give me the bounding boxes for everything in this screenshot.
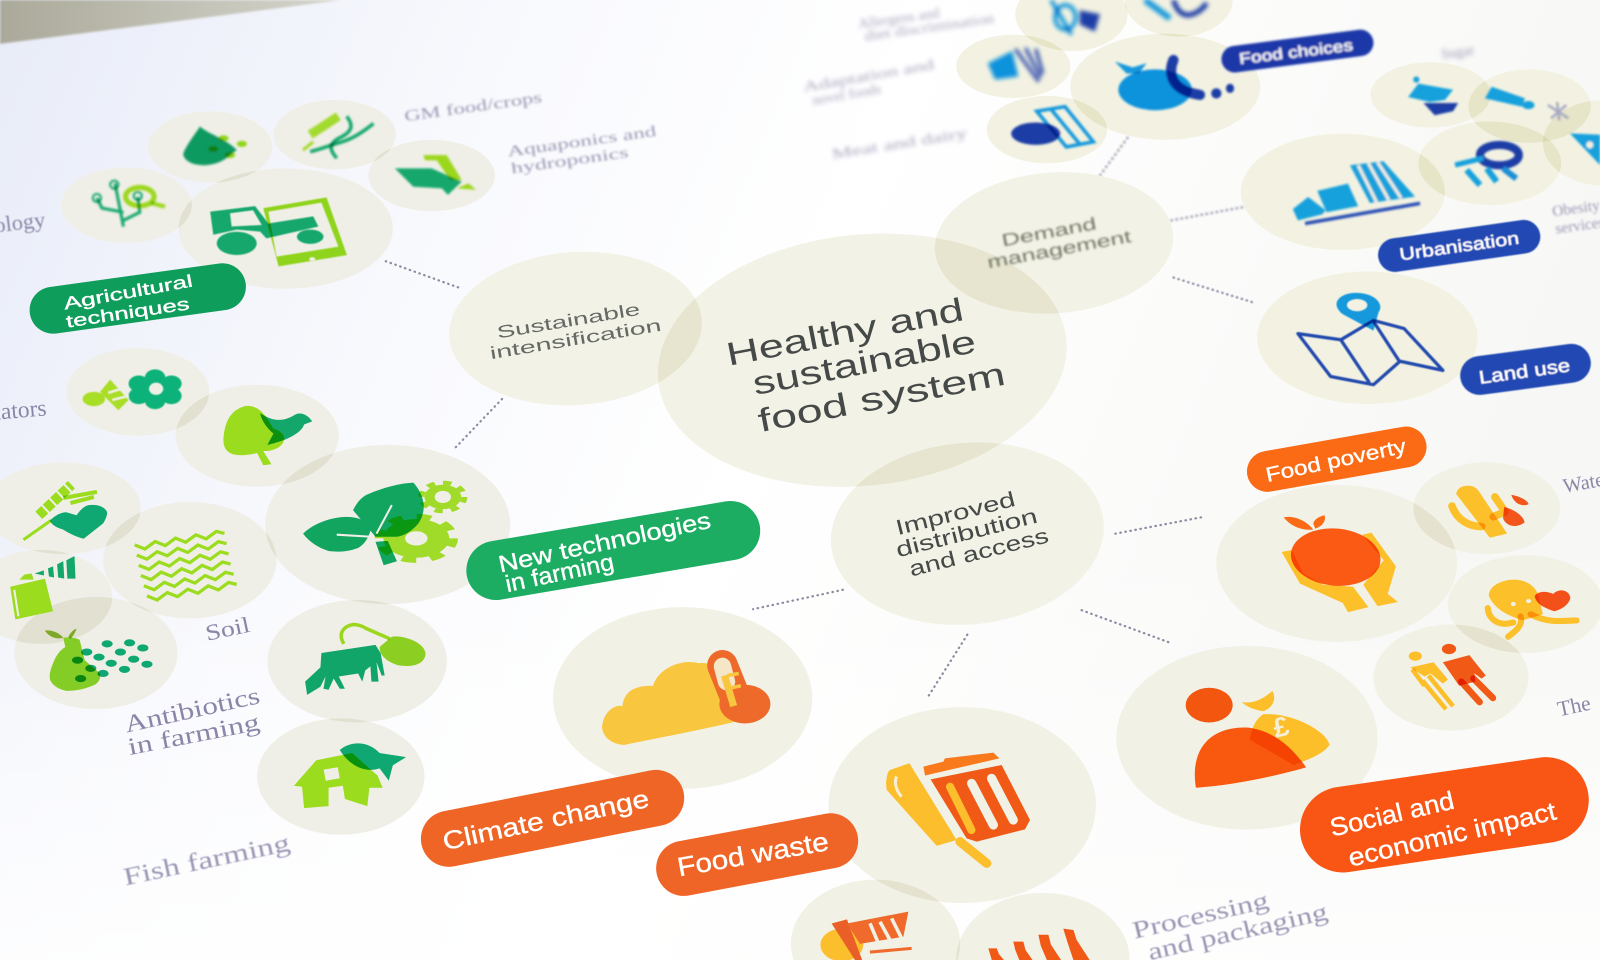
label: Aquaponics and hydroponics: hydroponics bbox=[510, 144, 630, 177]
pill: Agricultural techniques: techniques bbox=[65, 293, 191, 332]
label: Improved distribution and access bbox=[893, 487, 1051, 581]
label: Adaptation and novel foods bbox=[802, 57, 935, 109]
icon: elephant eyes bbox=[1511, 599, 1531, 606]
label: Antibiotics in farming: in farming bbox=[126, 709, 262, 761]
icon: urban buildings bbox=[1293, 161, 1420, 223]
icon: bin and food bbox=[886, 753, 1030, 863]
icon: hands holding orange bbox=[1282, 515, 1398, 612]
pill: New technologies in farming: in farming bbox=[503, 549, 616, 597]
icon: house window bbox=[324, 767, 340, 781]
label: Obesity services bbox=[1551, 197, 1600, 238]
icon: tree and bird bbox=[223, 406, 312, 465]
icon: elephant and heart bbox=[1488, 580, 1577, 637]
label: Demand management: Demand bbox=[1000, 213, 1098, 250]
title: Healthy and bbox=[723, 290, 966, 373]
icon: tractor window and tablet button bbox=[230, 210, 315, 261]
icon: pear and dots bbox=[45, 629, 153, 691]
pill: New technologies in farming: New technologies bbox=[496, 507, 713, 577]
label: Sustainable intensification: intensification bbox=[488, 315, 663, 363]
pill: Social and economic impact: economic impact bbox=[1346, 798, 1559, 873]
title: sustainable bbox=[749, 322, 979, 402]
icon: map pin hole bbox=[1347, 299, 1367, 311]
circles: blue group bbox=[956, 0, 1600, 404]
icon: tomato and croissant bbox=[1115, 60, 1234, 110]
label: Sustainable intensification: Sustainable bbox=[495, 299, 642, 342]
label: Demand management: management bbox=[986, 226, 1133, 272]
label: Soil: Soil bbox=[203, 612, 252, 646]
label: Adaptation and novel foods: novel foods bbox=[811, 81, 883, 109]
icon: flower centre and bee stripes bbox=[108, 383, 163, 400]
icon: bottles bbox=[988, 929, 1090, 960]
icon: top fork bbox=[1145, 0, 1207, 18]
label: Improved distribution and access: distribution bbox=[893, 504, 1040, 562]
icon: cloud and thermometer bbox=[602, 662, 770, 745]
label: Demand management bbox=[986, 213, 1133, 272]
pill: Urbanisation: Urbanisation bbox=[1398, 228, 1520, 264]
icon: right partial triangle bbox=[1570, 133, 1600, 165]
icon: milk and meat bbox=[1011, 107, 1093, 147]
icon: water drop bbox=[183, 127, 247, 165]
icon: soil layers bbox=[135, 531, 237, 600]
label: Aquaponics and hydroponics bbox=[506, 123, 658, 177]
table corner bbox=[0, 0, 342, 44]
icon: person and money bag bbox=[1186, 688, 1330, 788]
pill: New technologies in farming bbox=[496, 507, 731, 597]
pill: Food waste: Food waste bbox=[675, 826, 831, 882]
icon: fork and novel food bbox=[988, 48, 1043, 82]
pill: Social and economic impact bbox=[1327, 787, 1559, 873]
circles: orange group bbox=[553, 462, 1600, 960]
icon: two people bbox=[1409, 644, 1493, 709]
icon: top DNA bbox=[1051, 0, 1100, 35]
label: Adaptation and novel foods: Adaptation and bbox=[802, 57, 935, 96]
label: Meat and dairy: Meat and dairy bbox=[831, 126, 970, 163]
pill: Social and economic impact: Social and bbox=[1327, 787, 1457, 843]
label: Allergens and diet discrimination: diet discrimination bbox=[864, 11, 995, 45]
pill: Food choices: Food choices bbox=[1238, 37, 1354, 68]
connector lines bbox=[386, 138, 1255, 696]
pill: Food poverty: Food poverty bbox=[1264, 436, 1409, 487]
label: Sugar: Sugar bbox=[1440, 43, 1476, 63]
title bbox=[723, 290, 1008, 439]
circles: core themes bbox=[444, 164, 1178, 636]
label: Processing and packaging bbox=[1130, 887, 1330, 960]
label: The: The bbox=[1555, 691, 1593, 721]
pill: Land use: Land use bbox=[1478, 354, 1571, 388]
icon: pound sign: £ bbox=[1270, 710, 1292, 744]
pill: Agricultural techniques: Agricultural bbox=[62, 271, 194, 314]
icon: aquaponics bbox=[395, 155, 476, 195]
label: Antibiotics in farming: Antibiotics bbox=[122, 682, 262, 739]
icon: wheat and heart bbox=[23, 485, 107, 540]
icon: pen and sugar bbox=[1485, 87, 1568, 120]
icon: leaf veins bbox=[337, 505, 392, 537]
label: Improved distribution and access: Improved bbox=[893, 487, 1018, 540]
label: Allergens and diet discrimination: Allergens and bbox=[858, 5, 941, 33]
label: Processing and packaging: Processing bbox=[1130, 887, 1271, 945]
label: Sustainable intensification bbox=[488, 299, 663, 363]
icon: cactus and water drops bbox=[1452, 486, 1529, 538]
icon: cow and antibiotic capsule bbox=[305, 624, 426, 695]
title: food system bbox=[755, 355, 1008, 439]
icon: GM crops bbox=[303, 116, 373, 158]
icon: bee and flower bbox=[83, 369, 182, 410]
label: Fish farming: Fish farming bbox=[121, 828, 293, 892]
icon: house and fish bbox=[294, 743, 406, 808]
circles: green group bbox=[0, 100, 510, 835]
label: Antibiotics in farming bbox=[122, 682, 262, 761]
icon: leaves bbox=[303, 483, 424, 565]
label: Allergens and diet discrimination bbox=[858, 5, 995, 45]
icon: tractor and tablet bbox=[210, 197, 347, 266]
label: Improved distribution and access: and access bbox=[907, 523, 1051, 581]
pill: Climate change: Climate change bbox=[440, 785, 652, 856]
icon: shopping cart bbox=[820, 912, 912, 960]
pill: Food choices bbox=[1235, 37, 1360, 68]
label: Aquaponics and hydroponics: Aquaponics and bbox=[506, 123, 658, 161]
icon: biotechnology plant bbox=[93, 181, 165, 227]
label: GM food/crops: GM food/crops bbox=[403, 89, 543, 125]
label: Obesity services: Obesity bbox=[1551, 197, 1600, 220]
icon: spray can bbox=[10, 556, 76, 619]
icon: gears bbox=[380, 483, 464, 560]
icon: map and pin bbox=[1298, 293, 1443, 385]
icon: obesity medal bbox=[1455, 145, 1519, 185]
icon: cupcake bbox=[1408, 77, 1458, 115]
pill: Agricultural techniques bbox=[53, 271, 222, 332]
